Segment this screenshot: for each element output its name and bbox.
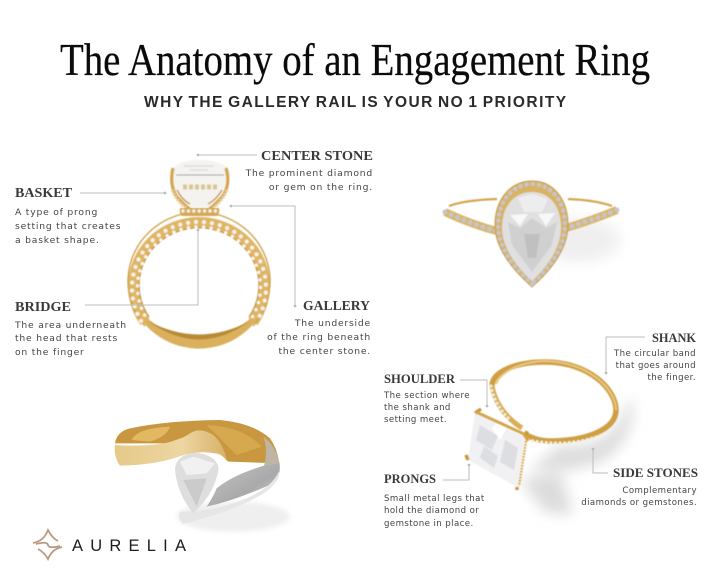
prongs [466,409,527,490]
callout: bridge: BRIDGE [15,299,71,314]
callout: prongs: gemstone in place. [384,519,474,529]
band [134,223,264,322]
soft shadow [536,218,620,262]
callout: basket: A type of prong [15,207,98,218]
callout: side stones: Complementary [622,486,697,496]
callout: gallery: GALLERY [303,298,370,313]
soft shadow [177,502,290,532]
callout: bridge [14,229,199,358]
square diamond [468,413,525,487]
ring: pear halo [445,181,620,287]
center stone [170,160,231,207]
halo [495,181,568,287]
cast shadow [530,395,633,471]
callout: gallery: the center stone. [279,346,371,357]
ring: square stone solitaire [466,361,633,515]
callout: bridge: The area underneath [14,320,127,331]
callout: gallery: The underside [294,318,371,329]
white gold outer shank [179,472,279,524]
callout: shank: the finger. [647,373,696,383]
prongs and basket [172,168,228,216]
callout: bridge: on the finger [15,347,85,358]
band [449,199,612,206]
outer gold edge [128,212,270,326]
callout: center stone: CENTER STONE [261,148,373,163]
callout: side stones: SIDE STONES [613,466,698,480]
callout: shank [605,331,696,383]
subtitle: WHY THE GALLERY RAIL IS YOUR NO 1 PRIORITY [144,94,568,111]
pear diamond [502,192,561,281]
band [492,362,616,441]
callout: center stone: or gem on the ring. [269,182,373,193]
callout: prongs: hold the diamond or [384,506,479,516]
callout: side stones [581,448,698,508]
callout: basket: BASKET [15,185,72,200]
callout: shank: The circular band [613,349,696,359]
ring: side view with labelled basket and gallery [128,160,270,349]
callout: center stone: The prominent diamond [245,168,373,179]
callout: shoulder: SHOULDER [384,372,456,386]
callout: side stones: diamonds or gemstones. [581,498,697,508]
callout: gallery: of the ring beneath [267,332,371,343]
ring: bypass two-tone [115,420,290,532]
callout: shoulder: the shank and [384,403,451,413]
pave outer row [132,222,266,321]
pave inner row [138,227,260,319]
callout: prongs: PRONGS [384,472,436,486]
callout: shank: that goes around [616,361,696,371]
bottom shank [143,319,255,349]
side stones [445,210,617,232]
wordmark: AURELIA [72,537,186,555]
callout: gallery [230,205,371,357]
callout: shank: SHANK [652,331,696,345]
white gold inner shank [207,462,280,507]
side stones [491,386,604,443]
callout: shoulder [383,372,488,425]
callout: center stone [197,148,373,193]
callout: shoulder: setting meet. [384,415,447,425]
inner gold edge [139,228,259,317]
callout: basket: a basket shape. [15,235,100,246]
gold outer shank [115,430,227,466]
callout: shoulder: The section where [383,391,470,401]
inner gold [115,420,279,463]
callout: basket: setting that creates [15,221,121,232]
callout: basket [15,185,166,246]
pear diamond [175,453,219,513]
callout: bridge: the head that rests [15,333,118,344]
icon: logo star [33,530,62,559]
callout: prongs [384,464,485,529]
callout: prongs: Small metal legs that [384,494,485,504]
logo: AURELIA [33,530,186,559]
